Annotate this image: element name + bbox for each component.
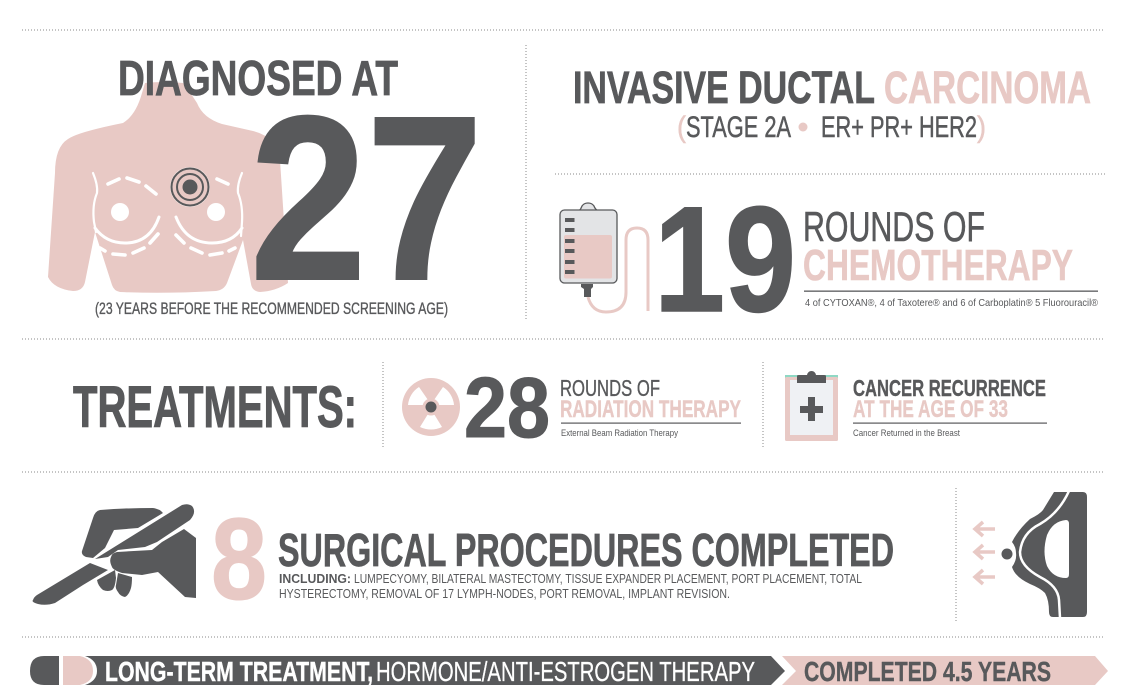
heading: surgical procedures: SURGICAL PROCEDURES COMPLETED [278,524,894,576]
label: rounds of chemotherapy: 4 of CYTOXAN®, 4 of Taxotere® and 6 of Carboplatin® 5 Fluorouracil® [805,297,1098,309]
heading: invasive ductal carcinoma: INVASIVE DUCTAL [573,62,875,113]
icon: torso with tumour target [48,82,288,293]
label: cancer recurrence [853,375,1047,439]
note: screening age: (23 YEARS BEFORE THE RECOMMENDED SCREENING AGE) [95,300,448,318]
text: list of procedures [279,571,862,601]
subheading: stage and receptors: ) [977,111,986,144]
label: rounds of chemotherapy [803,203,1098,309]
subheading: stage and receptors: ( [677,111,686,144]
text: list of procedures: INCLUDING: [279,571,351,586]
big number: 27: 27 [250,67,483,329]
subheading: stage and receptors: STAGE 2A [686,111,791,144]
subheading: stage and receptors: ER+ PR+ HER2 [821,111,977,144]
text: list of procedures: HYSTERECTOMY, REMOVAL OF 17 LYMPH-NODES, PORT REMOVAL, IMPLANT REVISION. [279,586,730,601]
label: cancer recurrence: Cancer Returned in the Breast [853,428,960,439]
bar: long-term treatment: HORMONE/ANTI-ESTROGEN THERAPY [376,656,755,687]
icon: hand holding scalpel [33,504,196,605]
icon: breast implant cross-section [975,491,1087,618]
label: rounds of radiation therapy: External Beam Radiation Therapy [561,428,678,439]
label: cancer recurrence: CANCER RECURRENCE [853,375,1046,401]
big number: 8: 8 [211,494,267,624]
big number: 19: 19 [654,175,796,343]
subheading: stage and receptors [677,111,986,144]
label: rounds of radiation therapy: ROUNDS OF [560,375,660,401]
icon: clipboard with plus [785,371,838,441]
text: list of procedures: LUMPECYOMY, BILATERAL MASTECTOMY, TISSUE EXPANDER PLACEMENT, PORT PLACEMENT, TOTAL [354,571,862,586]
big number: 28: 28 [464,361,550,456]
bar: long-term treatment [30,656,785,687]
bar: completed 4.5 years: COMPLETED 4.5 YEARS [804,656,1051,687]
heading: treatments: TREATMENTS: [73,375,357,440]
label: rounds of chemotherapy: ROUNDS OF [803,203,985,250]
bar: long-term treatment: LONG-TERM TREATMENT, [105,656,373,687]
icon: radiation symbol [402,378,460,436]
label: cancer recurrence: AT THE AGE OF 33 [853,396,1008,423]
heading: diagnosed at: DIAGNOSED AT [118,52,398,106]
label: rounds of radiation therapy: RADIATION THERAPY [560,396,741,423]
label: rounds of radiation therapy [560,375,741,439]
icon: IV bag [560,203,648,312]
